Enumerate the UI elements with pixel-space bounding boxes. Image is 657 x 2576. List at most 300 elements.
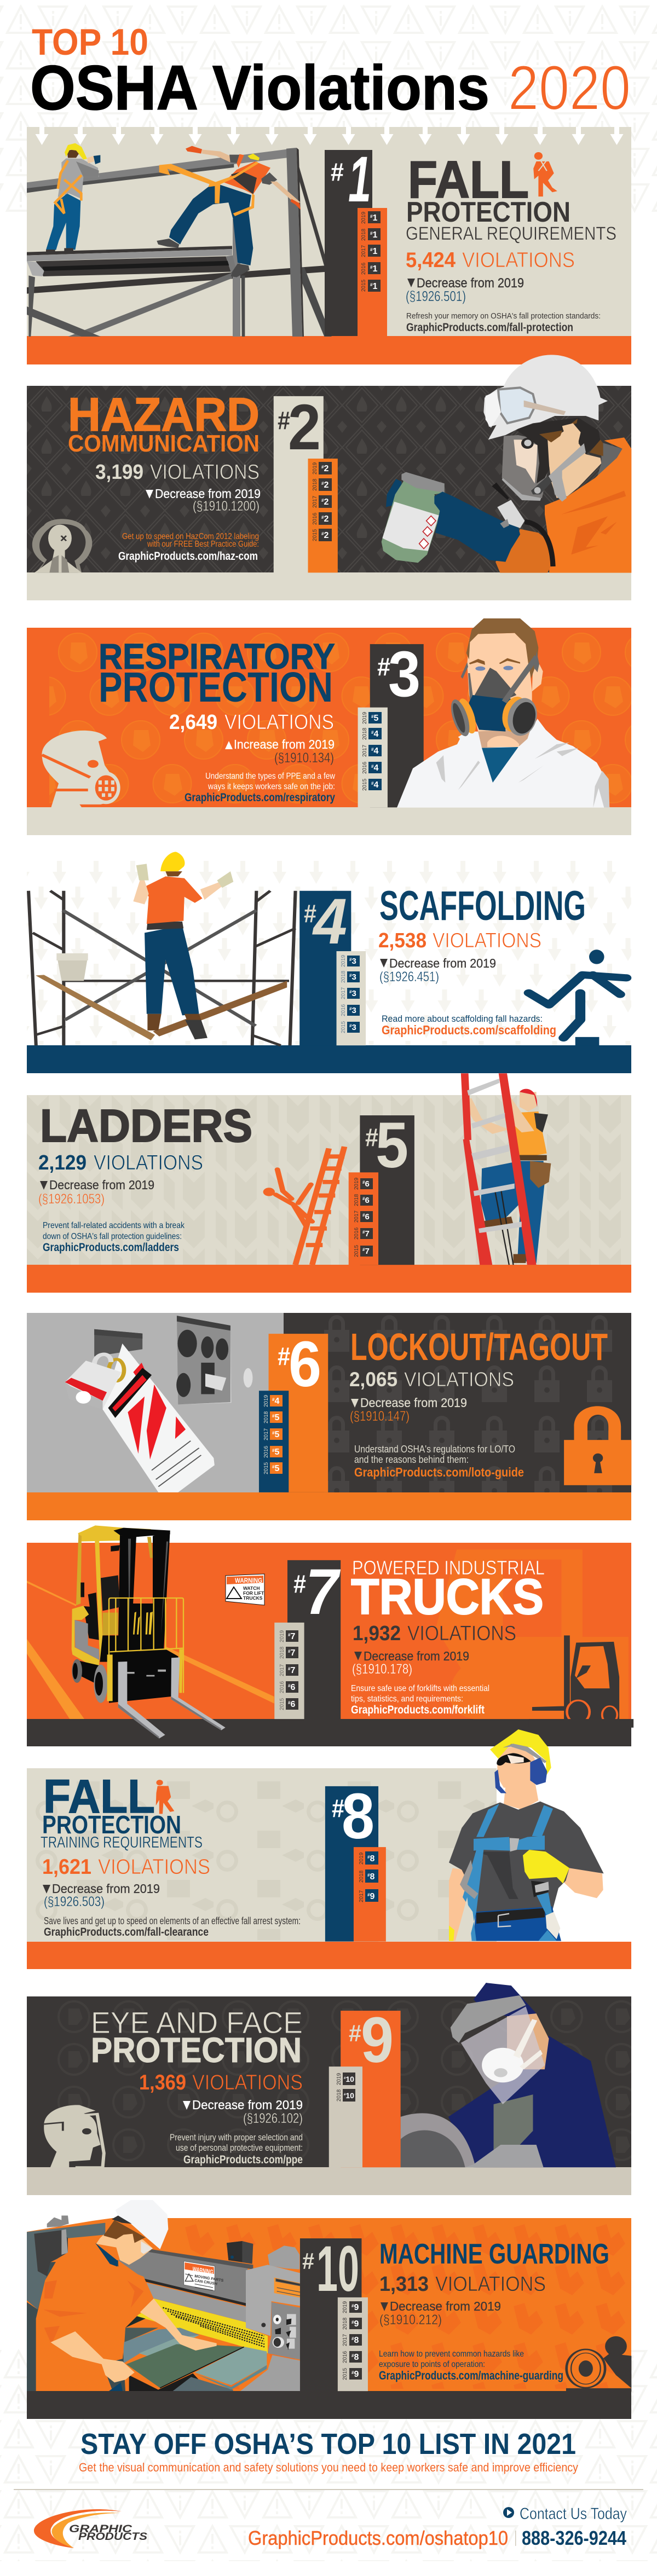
year labels: 2015 [362,778,368,791]
footer band [27,336,631,364]
year labels: 2015 [342,2367,348,2380]
rank values [367,1854,374,1901]
year labels: 2017 [341,987,347,999]
illustration: man in respirator [397,618,609,808]
rank values: #4 [371,763,378,773]
year labels: 2019 [354,1177,360,1190]
year labels: 2018 [359,1870,365,1883]
rank values: #6 [362,1212,370,1222]
divider [14,2489,643,2490]
year ranks [263,1394,283,1474]
badge and icon shapes [42,644,424,807]
footer band [27,1045,631,1073]
rank values [362,1179,370,1256]
year labels: 2016 [342,2351,348,2363]
rank values: #2 [321,481,328,490]
code reference: (§1926.451) [379,969,439,985]
violations count: VIOLATIONS [150,461,260,484]
ghost forklift [436,1549,629,1719]
rank values: #8 [351,2336,359,2345]
badge number: 7 [306,1556,341,1628]
badge number: 10 [316,2233,359,2305]
year labels [359,1852,365,1902]
rank values: #4 [371,780,378,790]
panel background [27,1543,631,1719]
year labels: 2018 [362,727,368,740]
heading: fall: FALL [43,1770,155,1823]
year labels: 2019 [341,954,347,967]
bed and sheet [125,2313,146,2328]
rank values [349,957,356,1032]
icon: padlock [574,1406,621,1441]
year labels [263,1394,269,1474]
illustration: scaffold and workers [27,143,332,337]
code reference: (§1910.1200) [193,499,260,514]
year labels: 2015 [361,279,367,292]
icon: harnessed figure [533,152,557,196]
badge number: 6 [289,1328,321,1400]
description [379,2349,524,2369]
sign message: FOR LIFT [243,1590,264,1596]
year labels: 2018 [342,2317,348,2330]
wheels [94,1665,108,1703]
rank values: #5 [272,1464,279,1473]
falling ladder [296,1147,344,1265]
panel background [27,386,631,572]
rank values: #9 [367,1892,374,1901]
heading: protection: PROTECTION [99,664,333,711]
logo arcs [34,2509,122,2548]
body [83,1606,99,1640]
heading: protection: PROTECTION [42,1810,181,1839]
year labels: 2016 [354,1227,360,1240]
year strip [274,1623,304,1719]
badge number: 3 [388,638,420,710]
heading: general requirements: GENERAL REQUIREMENTS [406,223,616,244]
link: GraphicProducts.com/respiratory [185,791,335,804]
violations count: 5,424 [406,248,456,272]
description: Prevent injury with proper selection and [170,2132,303,2143]
description: tips, statistics, and requirements: [351,1694,463,1704]
year labels: 2018 [354,1194,360,1206]
violations count: VIOLATIONS [433,929,541,952]
badge column [274,396,324,572]
rank values: #1 [370,247,377,256]
title [30,21,631,123]
code reference: (§1926.503) [44,1894,105,1909]
icon: slipping figure [529,975,626,1038]
rank values: #7 [288,1648,295,1658]
description: with our FREE Best Practice Guide: [147,540,259,549]
description: Refresh your memory on OSHA's fall protection standards: [406,311,601,321]
background warning pattern bottom [0,2348,657,2561]
year labels: 2015 [341,1021,347,1033]
description: Understand OSHA's regulations for LO/TO [354,1444,515,1455]
code reference: (§1910.134) [274,750,334,766]
violations count: VIOLATIONS [98,1855,210,1879]
description [43,1221,185,1241]
violations count [139,2071,303,2094]
year labels: 2019 [312,462,318,474]
sign triangle [227,1587,241,1599]
year ranks [362,711,382,791]
badge column [360,1115,414,1265]
background icons [181,2222,631,2389]
heading: eye and face: EYE AND FACE [91,2005,303,2040]
violations count: 2,538 [378,929,427,952]
violations count: 1,621 [42,1855,91,1879]
strip [358,208,387,336]
panel: #9 eye and face protection [27,1983,631,2195]
panel: #8 fall protection training [27,1729,631,1969]
code reference: (§1910.212) [379,2312,442,2328]
background chevrons [27,1095,631,1265]
contact text: Contact Us Today [520,2505,627,2523]
trend: Decrease from 2019 [52,1882,160,1896]
illustration: worker with chemical jar [382,355,631,573]
boxes [286,1630,298,1710]
year strip [259,1391,289,1492]
operator [36,2236,154,2391]
rank values: #5 [371,714,378,723]
link: GraphicProducts.com/machine-guarding [379,2369,563,2382]
heading: protection: PROTECTION [91,2030,302,2070]
background icon circles [49,629,631,807]
front guard [109,1598,183,1701]
yellow guard [125,2299,268,2353]
illustration: machine and operator [27,2200,300,2391]
rank values: #3 [349,989,356,998]
illustration: worker on scaffold [28,852,626,1045]
trend: Increase from 2019 [234,737,335,751]
year labels: 2017 [263,1428,269,1440]
year labels [361,211,367,292]
heading: communication: COMMUNICATION [68,430,260,457]
year labels: 2018 [341,970,347,983]
boxes [365,1851,378,1902]
background icons [52,1998,631,2167]
year strip [338,2297,368,2391]
footer band [27,1942,631,1969]
panel: #3 respiratory protection [27,618,631,835]
link: GraphicProducts.com/scaffolding [382,1023,556,1037]
rank values: #6 [288,1683,295,1692]
year labels: 2015 [279,1698,285,1710]
badge number: 8 [342,1780,374,1853]
heading: training requirements: TRAINING REQUIREMENTS [41,1834,203,1851]
rank values: #10 [344,2091,354,2100]
link: GraphicProducts.com/ladders [43,1241,179,1254]
year labels: 2019 [279,1630,285,1642]
violations count: VIOLATIONS [192,2071,303,2094]
link: GraphicProducts.com/forklift [351,1704,485,1716]
trend: Decrease from 2019 [49,1178,154,1192]
year labels: 2017 [342,2334,348,2346]
rank values: #3 [349,1006,356,1015]
panel background [27,1768,497,1942]
badge column [370,644,424,807]
year ranks [312,462,332,541]
year labels [362,711,368,791]
rank values: #2 [321,497,328,507]
dark area [284,1313,631,1492]
background warning pattern top [0,0,657,215]
rank values: #3 [349,957,356,966]
violations count [349,1368,514,1391]
badge column [299,891,351,1045]
description [354,1444,515,1465]
badge column [325,150,372,336]
violations count: VIOLATIONS [404,1368,514,1391]
badge and icon shapes [300,2238,631,2392]
subhead: Get the visual communication and safety solutions you need to keep workers safe and improve efficiency [79,2461,578,2474]
year labels: 2016 [361,262,367,275]
year labels: 2016 [362,761,368,774]
heading: respiratory: RESPIRATORY [99,636,335,676]
badge hash: # [293,1570,306,1598]
boxes [368,712,382,790]
description: ways it keeps workers safe on the job: [208,782,335,791]
rank values: #4 [272,1397,279,1406]
footer band [27,1492,631,1520]
footer band [27,2391,631,2419]
footer band [27,807,631,835]
description: Understand the types of PPE and a few [205,772,335,781]
illustration: forklift and floor lines [27,1525,274,1739]
year labels: 2017 [354,1210,360,1223]
rank values [370,213,377,291]
rank values: #8 [351,2353,359,2362]
rank values: #2 [321,531,328,540]
roll cage [78,1525,151,1542]
badge number: 2 [288,391,321,464]
logo wordmark: GRAPHIC [69,2523,132,2535]
title line: osha violations: OSHA Violations [30,53,489,123]
panel background [27,1996,631,2167]
boxes [347,956,360,1033]
badge column [325,1786,378,1942]
rank values: #8 [367,1872,374,1882]
rank values: #3 [349,972,356,982]
description: use of personal protective equipment: [176,2143,303,2153]
illustration: danger tag and padlock [65,1316,631,1492]
sign message: WATCH [243,1585,260,1591]
rank values: #9 [351,2319,359,2329]
description: Learn how to prevent common hazards like [379,2349,524,2359]
violations count: VIOLATIONS [407,1622,516,1645]
sign plate [226,1574,264,1605]
rank values [272,1397,279,1473]
violations count [353,1622,516,1645]
description [205,772,335,791]
rank values: #4 [371,746,378,756]
heading: powered industrial: POWERED INDUSTRIAL [352,1556,545,1579]
badge number: 1 [348,143,371,216]
violations count [378,929,541,952]
year strip [349,1172,378,1265]
rank values: #1 [370,213,377,223]
icon: harnessed figure [156,1780,174,1814]
violations count [169,711,334,734]
badge number: 5 [376,1109,408,1182]
link: GraphicProducts.com/fall-protection [406,321,573,334]
link: GraphicProducts.com/loto-guide [354,1465,524,1479]
badge hash: # [304,899,316,928]
background locks [323,1313,631,1492]
year labels: 2019 [361,211,367,224]
description: and the reasons behind them: [354,1454,469,1465]
rank values: #5 [272,1430,279,1439]
year strip [337,951,366,1045]
year labels: 2019 [362,711,368,724]
left gray area [27,1313,284,1492]
rank values: #9 [351,2370,359,2379]
background icons [33,1776,497,1940]
ladder [461,1073,537,1265]
icon: head and lungs [32,519,92,572]
year labels: 2018 [312,478,318,491]
violations count: VIOLATIONS [94,1151,203,1174]
badge column [300,2238,361,2391]
boxes [360,1178,373,1257]
year labels: 2018 [263,1411,269,1423]
panel background [27,1095,631,1265]
violations count: 2,065 [349,1368,397,1391]
year labels: 2017 [312,495,318,508]
year labels: 2019 [336,2073,342,2085]
rank values [288,1632,295,1709]
year labels [341,954,347,1033]
badge hash: # [377,652,390,681]
boxes [270,1395,283,1474]
rank values: #2 [321,514,328,524]
badge number: 9 [361,2004,394,2076]
sign: warning [226,1574,264,1605]
violations count: VIOLATIONS [224,711,334,734]
badge hash: # [278,406,290,435]
rank values: #7 [288,1632,295,1641]
panel: #10 machine guarding [27,2200,631,2419]
rank values: #4 [371,730,378,739]
torso [449,1802,604,1912]
footer [34,2505,627,2549]
description: Ensure safe use of forklifts with essential [351,1684,489,1693]
year labels: 2019 [342,2301,348,2313]
badge column [341,2011,401,2167]
rank values: #6 [362,1179,370,1189]
year labels: 2017 [279,1664,285,1676]
year strip [308,459,338,572]
trend: Decrease from 2019 [389,956,496,970]
trend: Decrease from 2019 [417,276,524,291]
mast [118,1535,136,1651]
title line: top 10: TOP 10 [32,21,148,63]
year labels: 2017 [359,1890,365,1902]
year labels: 2017 [362,744,368,757]
footer link: GraphicProducts.com/oshatop10 [248,2527,508,2549]
footer band [27,2167,631,2195]
footer band [27,1719,631,1746]
year labels: 2016 [279,1681,285,1693]
illustration: worker with face shield [44,1983,616,2167]
rank values: #6 [288,1700,295,1709]
badge column [287,1560,341,1719]
sign header [227,1576,263,1584]
background arrows [27,861,631,1045]
heading: trucks: TRUCKS [351,1569,544,1625]
rank values [351,2303,359,2379]
badge hash: # [332,1794,344,1822]
arm and neck [504,1780,538,1810]
year labels: 2018 [279,1646,285,1659]
sign message: TRUCKS [243,1595,263,1601]
closing call to action [79,2428,578,2474]
rank values: #6 [362,1196,370,1205]
heading: protection: PROTECTION [406,196,570,228]
year strip [329,2066,362,2167]
year labels [312,462,318,541]
trend: Decrease from 2019 [364,1649,469,1663]
violations count: 1,313 [379,2273,429,2296]
logo wordmark [69,2523,147,2543]
trend: Decrease from 2019 [192,2098,303,2112]
illustration: ladders and climber [263,1073,551,1265]
year labels: 2017 [361,245,367,257]
description [170,2132,303,2153]
machine sign message: CAN CRUSH [194,2279,217,2286]
rank values: #5 [272,1448,279,1457]
code reference: (§1926.501) [406,288,466,304]
boxes [368,211,381,292]
rank values: #8 [367,1854,374,1863]
icon: head with face shield [44,2105,101,2167]
rank values [344,2075,354,2100]
rank values: #9 [351,2303,359,2312]
rank values: #7 [362,1229,370,1238]
footer band [27,572,631,600]
year labels: 2019 [359,1852,365,1865]
climber [481,1161,545,1263]
year ranks [359,1851,378,1902]
rank values: #10 [344,2075,354,2083]
worker one [46,193,80,250]
description: Read more about scaffolding fall hazards: [382,1014,543,1024]
link: GraphicProducts.com/fall-clearance [44,1926,209,1938]
rank values [321,464,328,540]
rank values: #7 [288,1666,295,1675]
separator [515,2531,516,2546]
badge hash: # [365,1123,378,1151]
link: GraphicProducts.com/ppe [183,2154,303,2166]
year ranks [342,2301,362,2380]
year labels: 2015 [354,1244,360,1257]
illustration: worker with harness [449,1729,604,1941]
rank values: #1 [370,264,377,274]
panel background [27,628,631,807]
code reference: (§1910.147) [350,1409,410,1424]
forks [118,1662,165,1739]
year strip [354,1847,386,1942]
panel: #5 ladders [27,1073,631,1293]
violations count: 3,199 [95,461,143,484]
badge hash: # [302,2248,314,2274]
heading: fall: FALL [408,150,529,209]
violations count: 2,129 [38,1151,87,1174]
rank values: #3 [349,1023,356,1032]
contact icon [503,2507,514,2518]
description [122,532,259,549]
worker two [169,184,253,265]
